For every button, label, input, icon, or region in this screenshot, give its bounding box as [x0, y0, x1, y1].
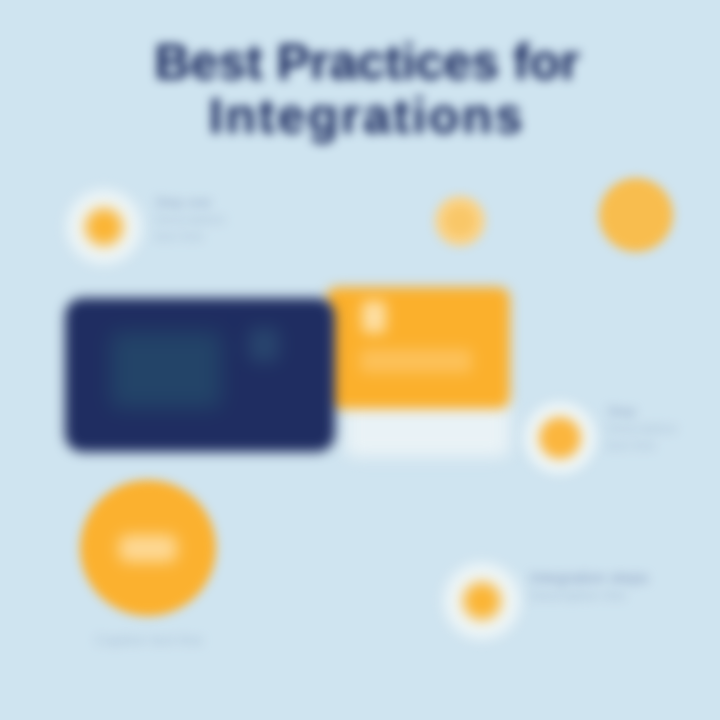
text block: middle right label: Step	[607, 403, 636, 419]
panel: orange card	[326, 287, 510, 409]
text block: card lines	[360, 349, 472, 373]
icon: card glyph	[362, 301, 386, 333]
icon: middle right badge	[522, 398, 600, 477]
icon: navy card glyph	[249, 328, 279, 362]
text block: top left label: Description	[155, 211, 225, 227]
icon: bottom right badge	[440, 560, 524, 642]
text block: top left label: Step one	[155, 194, 211, 210]
text block: bottom right label: Integration steps	[530, 570, 648, 587]
text block: large badge caption: Caption text line	[95, 632, 203, 649]
panel: navy card	[65, 298, 335, 452]
icon: top left badge	[64, 186, 144, 268]
text block: middle right label	[607, 403, 677, 453]
icon: top centre badge	[428, 190, 492, 252]
icon: large orange badge	[72, 472, 224, 624]
text block: navy card lines	[111, 332, 221, 408]
title	[150, 34, 586, 151]
icon: top right circle	[599, 178, 673, 252]
text block: top left label	[155, 194, 225, 244]
text block: bottom right label: Description line	[530, 587, 626, 603]
panel: white strip under orange card	[345, 395, 510, 457]
text block: bottom right label	[530, 570, 648, 603]
text block: top left label: text line	[155, 228, 203, 244]
title: Best Practices for	[154, 34, 580, 90]
title: Integrations	[209, 88, 525, 144]
icon: badge glyph	[119, 535, 177, 562]
text block: middle right label: text line	[607, 437, 655, 453]
text block: middle right label: Description	[607, 420, 677, 436]
